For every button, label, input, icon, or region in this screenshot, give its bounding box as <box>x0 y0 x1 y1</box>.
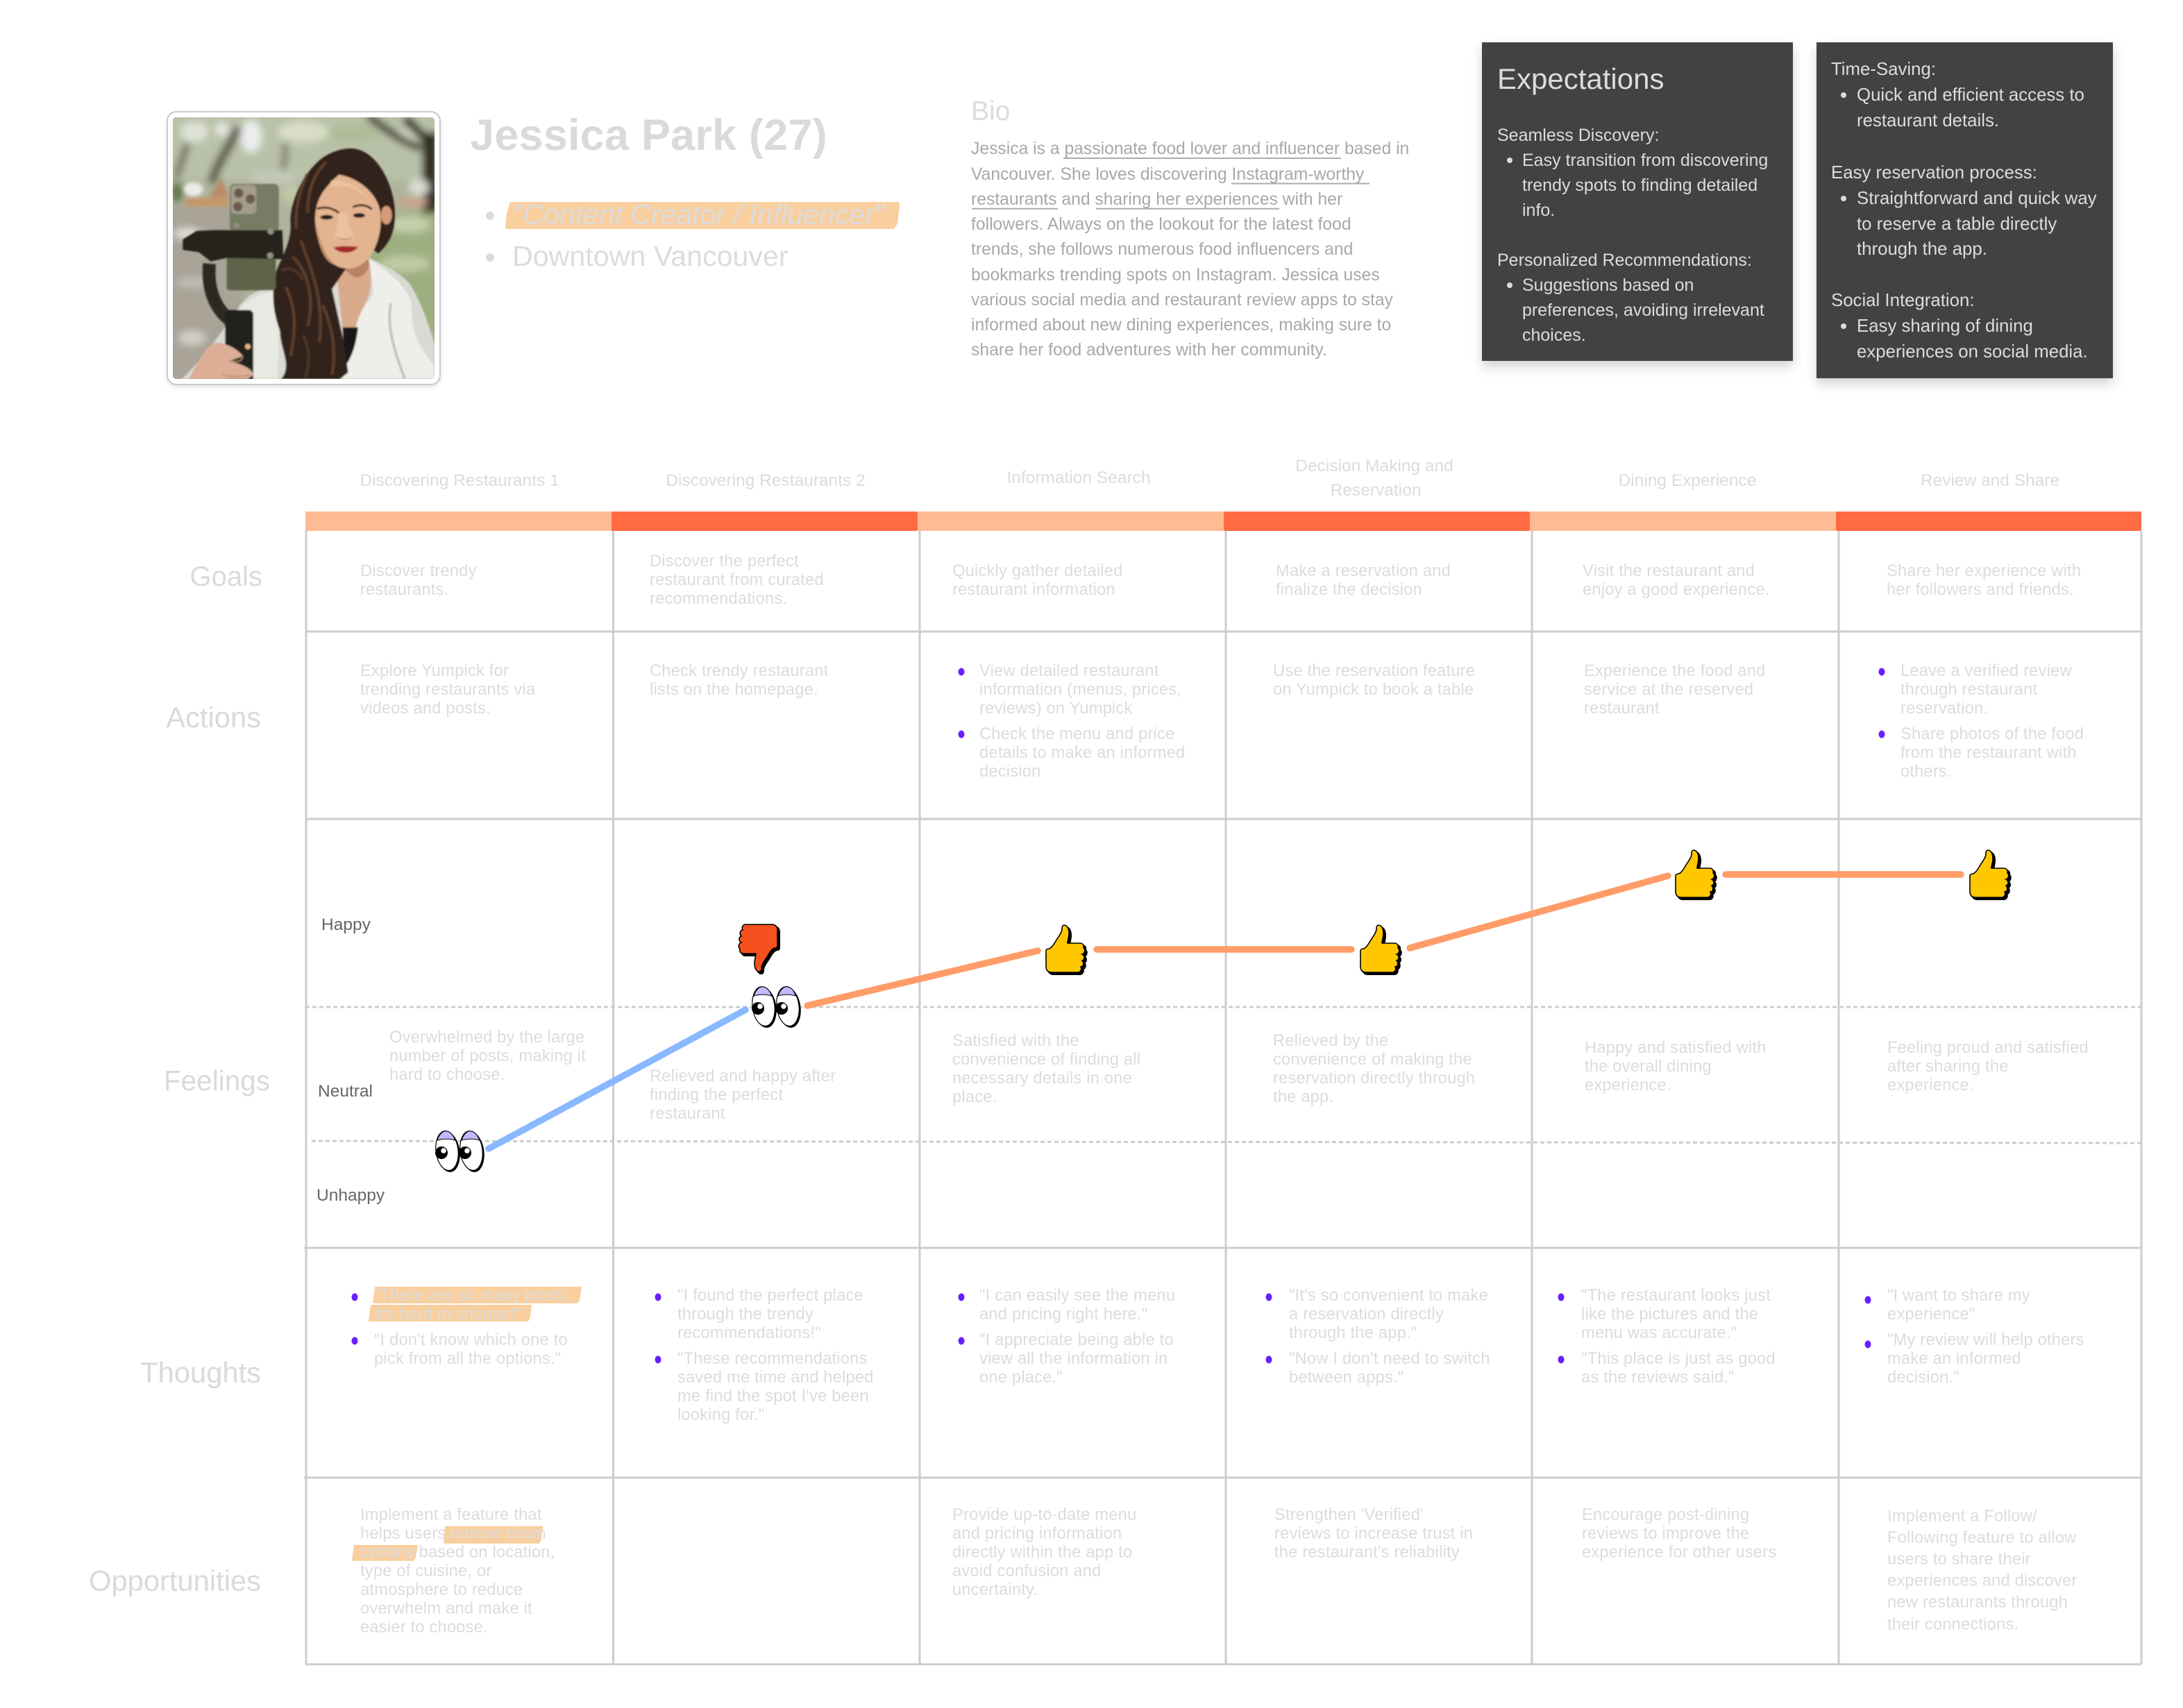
row: thoughts: "I appreciate being able to <box>979 1331 1174 1349</box>
emotion curve <box>489 874 1961 1149</box>
row: goals: Quickly gather detailed <box>952 562 1123 580</box>
row: goals: finalize the decision <box>1276 581 1422 599</box>
bullet <box>486 253 494 262</box>
row: feelings text: hard to choose. <box>389 1066 505 1084</box>
row: opportunities: the restaurant's reliability <box>1274 1544 1460 1562</box>
persona name: Jessica Park (27) <box>470 111 827 160</box>
row: thoughts: recommendations!" <box>677 1324 821 1342</box>
role text: "Content Creator / Influencer" <box>513 198 886 230</box>
row: feelings text: the app. <box>1273 1088 1333 1106</box>
expectations heading: Expectations <box>1497 62 1664 95</box>
personalized recommendations: Suggestions based on <box>1522 276 1694 295</box>
easy reservation: to reserve a table directly <box>1857 214 2057 234</box>
row: opportunities: reviews to increase trust in <box>1274 1525 1473 1543</box>
row: feelings text <box>389 1029 2089 1123</box>
quote highlight <box>369 1287 582 1321</box>
row: actions: Share photos of the food <box>1900 725 2084 743</box>
row: thoughts: experience" <box>1887 1305 1975 1324</box>
row: opportunities: Provide up-to-date menu <box>952 1506 1136 1524</box>
row: opportunities: users to share their <box>1887 1550 2031 1569</box>
row: feelings text: experience. <box>1585 1076 1671 1094</box>
portrait photo <box>167 111 442 387</box>
row: goals: recommendations. <box>650 590 787 608</box>
row: goals: Visit the restaurant and <box>1583 562 1755 580</box>
row: actions: others. <box>1900 763 1952 781</box>
bio paragraph: share her food adventures with her community. <box>971 341 1327 360</box>
row: thoughts: through the trendy <box>677 1305 814 1324</box>
row: actions: Check trendy restaurant <box>650 662 828 680</box>
row: feelings text: experience. <box>1887 1076 1974 1094</box>
row: thoughts: through the app." <box>1289 1324 1417 1342</box>
row: opportunities: avoid confusion and <box>952 1562 1102 1580</box>
row: thoughts: "My review will help others <box>1887 1331 2084 1349</box>
social integration: Social Integration: <box>1831 291 1975 310</box>
persona photo card <box>167 111 442 387</box>
row: thoughts: one place." <box>979 1369 1063 1387</box>
personalized recommendations <box>1497 251 1764 345</box>
icon: thumbs up, step 4 <box>1360 925 1401 974</box>
row: feelings text: place. <box>952 1088 997 1106</box>
row: thoughts: decision." <box>1887 1369 1959 1387</box>
row: thoughts: "I want to share my <box>1887 1287 2030 1305</box>
bio paragraph: Vancouver. She loves discovering Instagram-worthy <box>971 165 1365 184</box>
personalized recommendations: choices. <box>1522 325 1586 345</box>
row: goals: Share her experience with <box>1887 562 2081 580</box>
row: thoughts: "I don't know which one to <box>374 1331 568 1349</box>
row: opportunities: experiences and discover <box>1887 1572 2077 1590</box>
orange segments <box>807 874 1961 1006</box>
row: thoughts: "This place is just as good <box>1581 1350 1776 1368</box>
hand <box>189 343 253 379</box>
easy reservation: Easy reservation process: <box>1831 163 2037 183</box>
row: opportunities: directly within the app to <box>952 1544 1132 1562</box>
row: opportunities: overwhelm and make it <box>360 1600 532 1618</box>
bio <box>971 96 1409 360</box>
row labels: Goals <box>190 561 262 592</box>
row labels: Opportunities <box>89 1564 261 1597</box>
stage headers: Discovering Restaurants 1 <box>360 471 559 490</box>
icon: thumbs down, step 2 <box>739 924 779 974</box>
row labels: Actions <box>166 701 261 734</box>
row: feelings text: convenience of making the <box>1273 1051 1472 1069</box>
location text: Downtown Vancouver <box>512 240 789 272</box>
row: actions: Experience the food and <box>1584 662 1765 680</box>
easy reservation: through the app. <box>1857 239 1987 259</box>
row: actions: service at the reserved <box>1584 681 1753 699</box>
row: feelings text: Relieved by the <box>1273 1032 1388 1050</box>
role highlight <box>505 202 900 229</box>
row: opportunities: their connections. <box>1887 1616 2018 1634</box>
row: actions <box>360 662 2084 781</box>
row: goals: restaurant from curated <box>650 571 824 589</box>
seamless discovery: Easy transition from discovering <box>1522 151 1768 170</box>
row: thoughts: as the reviews said." <box>1581 1369 1735 1387</box>
row: thoughts: "There are so many posts, <box>374 1287 570 1305</box>
emotion scale labels <box>317 915 385 1205</box>
row: feelings text: necessary details in one <box>952 1069 1132 1088</box>
row: actions: reviews) on Yumpick <box>979 700 1133 718</box>
bio paragraph: various social media and restaurant review apps to stay <box>971 291 1394 310</box>
row: opportunities: easier to choose. <box>360 1618 488 1637</box>
row: actions: on Yumpick to book a table <box>1273 681 1474 699</box>
seamless discovery: trendy spots to finding detailed <box>1522 176 1758 195</box>
row: goals: Discover the perfect <box>650 552 799 570</box>
row: thoughts: "It's so convenient to make <box>1289 1287 1488 1305</box>
row: thoughts: "The restaurant looks just <box>1581 1287 1771 1305</box>
panel: expectations 1 <box>1482 42 1793 361</box>
row: thoughts: "These recommendations <box>677 1350 868 1368</box>
row: opportunities: and pricing information <box>952 1525 1122 1543</box>
row: feelings text: after sharing the <box>1887 1058 2009 1076</box>
row: feelings text: restaurant <box>650 1105 725 1123</box>
easy reservation: Straightforward and quick way <box>1857 189 2097 208</box>
row: opportunities: experience for other users <box>1582 1544 1776 1562</box>
row: thoughts: make an informed <box>1887 1350 2021 1368</box>
time saving: Quick and efficient access to <box>1857 85 2084 105</box>
stage headers: Dining Experience <box>1619 471 1756 490</box>
row: goals: restaurants. <box>360 581 448 599</box>
stage headers: Discovering Restaurants 2 <box>666 471 866 490</box>
row: feelings text: Happy and satisfied with <box>1585 1039 1767 1057</box>
row: goals: her followers and friends. <box>1887 581 2074 599</box>
emotion scale labels: Unhappy <box>317 1186 385 1205</box>
row: thoughts: me find the spot I've been <box>677 1387 869 1405</box>
row: opportunities: helps users narrow down <box>360 1525 546 1543</box>
row: thoughts: menu was accurate." <box>1581 1324 1737 1342</box>
face <box>315 175 381 269</box>
persona details list <box>486 198 900 272</box>
row: thoughts: "I found the perfect place <box>677 1287 863 1305</box>
social integration: Easy sharing of dining <box>1857 316 2033 336</box>
blue segment <box>489 1010 745 1149</box>
stage headers: Review and Share <box>1921 471 2059 490</box>
row: actions: Check the menu and price <box>979 725 1174 743</box>
row: thoughts: and pricing right here." <box>979 1305 1147 1324</box>
seamless discovery: info. <box>1522 201 1555 220</box>
row: thoughts: looking for." <box>677 1406 765 1424</box>
emotion scale labels: Happy <box>321 915 371 934</box>
row: opportunities: Encourage post-dining <box>1582 1506 1749 1524</box>
bio paragraph: bookmarks trending spots on Instagram. Jessica uses <box>971 266 1380 285</box>
row: opportunities: options based on location, <box>360 1544 555 1562</box>
row: opportunities: Implement a feature that <box>360 1506 542 1524</box>
gimbal and phone <box>230 184 279 232</box>
time saving <box>1831 60 2084 130</box>
stage headers: Reservation <box>1331 481 1421 500</box>
row: goals: enjoy a good experience. <box>1583 581 1770 599</box>
neck and chest <box>335 258 371 330</box>
time saving: restaurant details. <box>1857 111 1999 130</box>
easy reservation <box>1831 163 2097 259</box>
row labels: Feelings <box>164 1065 270 1097</box>
row: actions: reservation. <box>1900 700 1988 718</box>
row: thoughts: "Now I don't need to switch <box>1289 1350 1490 1368</box>
row: actions: details to make an informed <box>979 744 1185 762</box>
row: thoughts: like the pictures and the <box>1581 1305 1758 1324</box>
row: opportunities: uncertainty. <box>952 1581 1038 1599</box>
opportunity highlight <box>352 1526 543 1561</box>
row: feelings text: Overwhelmed by the large <box>389 1029 584 1047</box>
social integration <box>1831 291 2088 362</box>
seamless discovery <box>1497 126 1768 220</box>
row: actions: information (menus, prices, <box>979 681 1181 699</box>
row: opportunities: Following feature to allow <box>1887 1529 2077 1547</box>
row: opportunities <box>352 1506 2077 1637</box>
row: feelings text: Satisfied with the <box>952 1032 1079 1050</box>
social integration: experiences on social media. <box>1857 342 2088 362</box>
row: thoughts: it's hard to choose!" <box>374 1305 521 1324</box>
row: actions: decision <box>979 763 1041 781</box>
row: actions: from the restaurant with <box>1900 744 2077 762</box>
row: goals: restaurant information <box>952 581 1115 599</box>
bullet <box>486 212 494 220</box>
row: goals: Discover trendy <box>360 562 477 580</box>
row labels <box>89 561 270 1597</box>
row: actions: lists on the homepage. <box>650 681 818 699</box>
row: thoughts: saved me time and helped <box>677 1369 874 1387</box>
bio paragraph: followers. Always on the lookout for the latest food <box>971 215 1351 234</box>
row: actions: videos and posts. <box>360 700 491 718</box>
time saving: Time-Saving: <box>1831 60 1936 79</box>
row: feelings text: the overall dining <box>1585 1058 1712 1076</box>
row: goals <box>360 552 2081 608</box>
row: thoughts: a reservation directly <box>1289 1305 1444 1324</box>
row labels: Thoughts <box>140 1356 261 1389</box>
row: actions: trending restaurants via <box>360 681 536 699</box>
row: opportunities: type of cuisine, or <box>360 1562 491 1580</box>
row: actions: through restaurant <box>1900 681 2037 699</box>
row: feelings text: finding the perfect <box>650 1086 783 1104</box>
row: actions: Leave a verified review <box>1900 662 2072 680</box>
row: opportunities: atmosphere to reduce <box>360 1581 523 1599</box>
icon: thumbs up, step 6 <box>1970 850 2011 899</box>
row: thoughts: between apps." <box>1289 1369 1404 1387</box>
row: opportunities: new restaurants through <box>1887 1593 2068 1612</box>
row: feelings text: reservation directly through <box>1273 1069 1475 1088</box>
hair <box>273 149 395 379</box>
icon: eyes, step 1 <box>434 1130 487 1174</box>
emotion scale labels: Neutral <box>318 1082 373 1101</box>
row: feelings text: Feeling proud and satisfied <box>1887 1039 2089 1057</box>
row: feelings text: number of posts, making it <box>389 1047 586 1065</box>
row: thoughts: view all the information in <box>979 1350 1168 1368</box>
stage colour bars <box>305 511 2141 531</box>
row: thoughts: "I can easily see the menu <box>979 1287 1175 1305</box>
bio paragraph: Jessica is a passionate food lover and influencer based in <box>971 139 1409 158</box>
row: feelings text: Relieved and happy after <box>650 1067 836 1085</box>
row: thoughts: pick from all the options." <box>374 1350 561 1368</box>
bio paragraph: informed about new dining experiences, making sure to <box>971 316 1391 335</box>
bio underlines <box>972 158 1369 209</box>
stage headers: Information Search <box>1006 468 1151 487</box>
row: opportunities: Strengthen 'Verified' <box>1274 1506 1424 1524</box>
seamless discovery: Seamless Discovery: <box>1497 126 1659 145</box>
icon: thumbs up, step 3 <box>1046 925 1087 974</box>
row: opportunities: Implement a Follow/ <box>1887 1507 2037 1525</box>
bio heading: Bio <box>971 96 1010 126</box>
personalized recommendations: Personalized Recommendations: <box>1497 251 1752 270</box>
row: goals: Make a reservation and <box>1276 562 1451 580</box>
row: actions: Explore Yumpick for <box>360 662 509 680</box>
bio paragraph: trends, she follows numerous food influencers and <box>971 240 1353 259</box>
row: actions: Use the reservation feature <box>1273 662 1475 680</box>
icon: eyes, step 2 <box>750 986 803 1029</box>
icon: thumbs up, step 5 <box>1676 850 1717 899</box>
row: thoughts <box>351 1287 2084 1424</box>
row: actions: restaurant <box>1584 700 1660 718</box>
stage headers: Decision Making and <box>1295 457 1453 475</box>
row: feelings text: convenience of finding all <box>952 1051 1140 1069</box>
stage headers <box>360 457 2059 500</box>
shirt <box>182 258 435 379</box>
row: opportunities: reviews to improve the <box>1582 1525 1749 1543</box>
bio paragraph: restaurants and sharing her experiences with her <box>971 190 1342 209</box>
row: actions: View detailed restaurant <box>979 662 1159 680</box>
personalized recommendations: preferences, avoiding irrelevant <box>1522 301 1764 320</box>
panel: expectations 2 <box>1817 42 2113 378</box>
